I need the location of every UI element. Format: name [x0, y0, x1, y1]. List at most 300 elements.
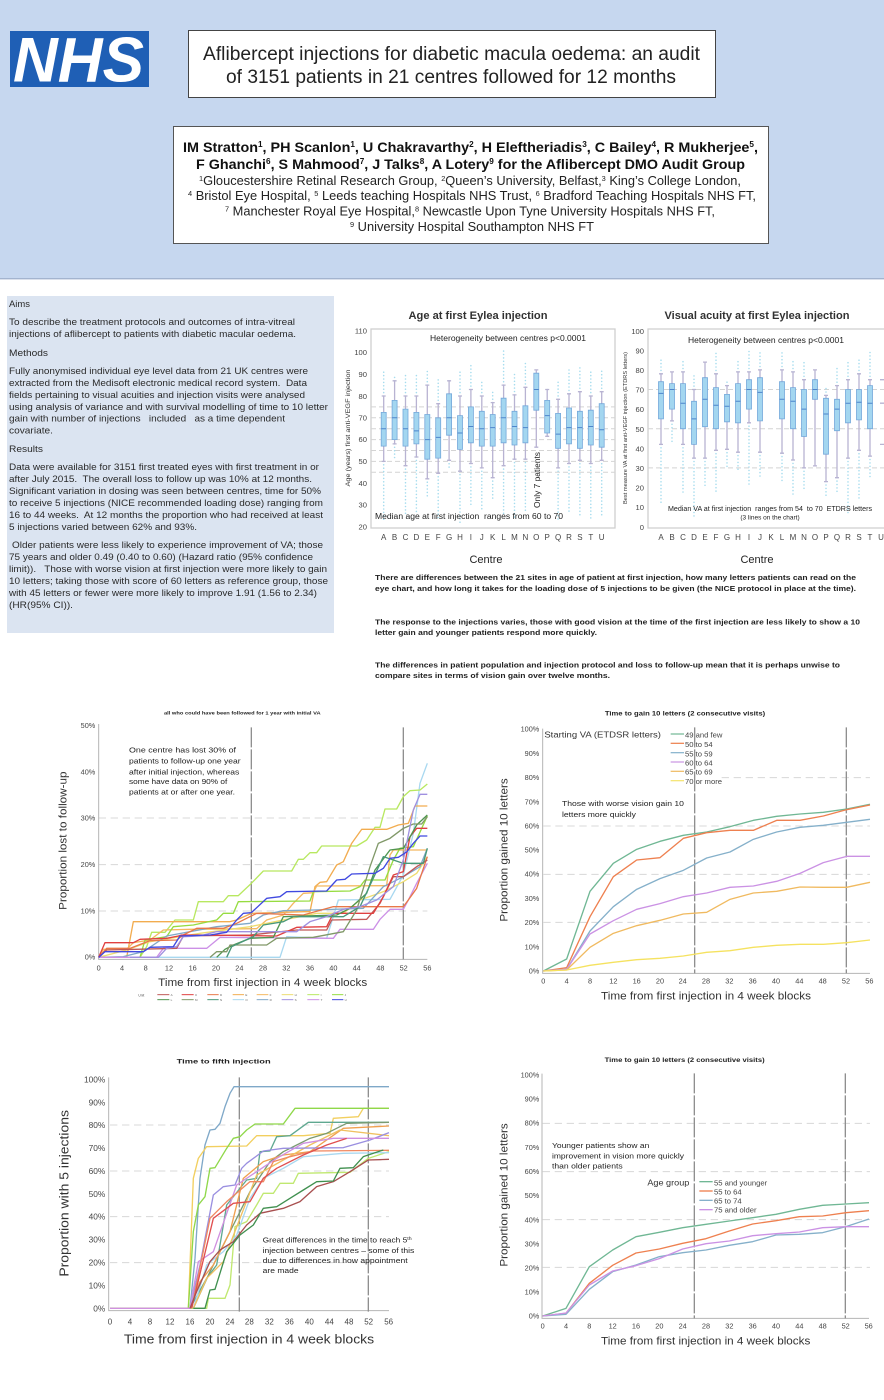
authors: , U Chakravarthy: [355, 139, 469, 155]
y axis labels: 10%: [81, 906, 96, 915]
legend: H: [295, 993, 297, 997]
legend: S: [295, 998, 297, 1002]
text: methods: fields pertaining to visual acuities and injection visits were analysed: [9, 390, 305, 400]
y axis title: Age (years) first anti-VEGF injection: [345, 369, 352, 486]
x axis labels: I: [470, 533, 472, 542]
text: results: 10 letters; taking those with score of 60 letters as reference group, those: [9, 576, 328, 586]
x axis labels: 56: [865, 977, 873, 986]
text: aims: injections of aflibercept to patients with diabetic macular oedema.: [9, 329, 296, 339]
y axis title: Best measure VA at first anti-VEGF injection (ETDRS letters): [623, 352, 629, 504]
legend: 55 to 59: [685, 749, 713, 758]
x axis labels: 56: [384, 1318, 394, 1327]
chart: time to fifth injection: [58, 1058, 415, 1346]
affiliations: Newcastle Upon Tyne University Hospitals NHS FT,: [419, 204, 715, 218]
x axis labels: M: [790, 533, 797, 542]
x axis labels: J: [758, 533, 762, 542]
y axis labels: 70%: [89, 1143, 106, 1153]
VA group lines: [543, 804, 870, 971]
x axis labels: O: [533, 533, 539, 542]
affiliations: Manchester Royal Eye Hospital,: [229, 204, 415, 218]
legend: M: [195, 998, 198, 1002]
annotation: [129, 746, 241, 796]
y axis labels: 80: [359, 392, 367, 401]
x axis labels: 44: [353, 964, 361, 973]
text: results: Significant variation in dosing was seen between centres, time for 50%: [9, 486, 321, 496]
outlier dots: [661, 350, 870, 517]
x axis labels: 0: [108, 1318, 113, 1327]
whiskers: [659, 362, 884, 482]
y axis labels: 10: [636, 503, 644, 512]
annotation: Great differences in the time to reach 5: [263, 1238, 383, 1245]
x axis labels: 24: [679, 977, 687, 986]
y axis labels: 30%: [525, 894, 540, 903]
y axis labels: [84, 1074, 106, 1313]
text: key findings: compare sites in terms of vision gain over twelve months.: [375, 671, 610, 680]
x axis labels: 12: [166, 1318, 175, 1327]
y axis labels: 40: [359, 479, 367, 488]
text: key findings: letter gain and younger patients respond more quickly.: [375, 628, 597, 637]
x axis labels: 8: [148, 1318, 153, 1327]
y axis labels: 50%: [89, 1189, 106, 1199]
x axis labels: 36: [285, 1318, 294, 1327]
chart title: Time to gain 10 letters (2 consecutive visits): [605, 1057, 765, 1064]
text: key findings: eye chart, and how long it takes for the loading dose of 5 injections to be given (the NICE protocol in place at the time).: [375, 584, 856, 593]
legend: 65 to 74: [714, 1197, 742, 1206]
x axis labels: D: [691, 533, 697, 542]
text: methods: gain with number of injections included as a time dependent: [9, 414, 285, 424]
affiliations: University Hospital Southampton NHS FT: [354, 219, 594, 234]
legend: 75 and older: [714, 1206, 757, 1215]
x axis labels: 32: [725, 1322, 733, 1331]
affiliations: Bristol Eye Hospital,: [192, 188, 314, 203]
text: results: 16 to 44 weeks. At 12 months the proportion who had received at least: [9, 510, 323, 520]
medians: [381, 390, 604, 440]
annotation: th: [407, 1236, 412, 1241]
annotation: [552, 1141, 684, 1170]
x axis labels: 0: [541, 977, 545, 986]
y axis labels: 0: [640, 523, 644, 532]
axis titles: Proportion gained 10 letters: [499, 778, 511, 922]
affiliations: 5: [314, 189, 318, 198]
y axis labels: 100%: [521, 725, 540, 734]
authors: , S Mahmood: [271, 156, 360, 172]
annotation: median VA: Median VA at first injection ranges from 54 to 70 ETDRS letters: [668, 506, 873, 513]
axis titles: Time from first injection in 4 week blocks: [158, 977, 368, 989]
boxes: [658, 378, 872, 454]
y axis labels: 10%: [525, 942, 540, 951]
y axis labels: 90%: [525, 749, 540, 758]
axis titles: Proportion with 5 injections: [58, 1110, 72, 1277]
x axis labels: 8: [144, 964, 148, 973]
legend: Age group: [647, 1177, 690, 1187]
affiliations: 1: [199, 174, 203, 183]
x axis labels: G: [724, 533, 730, 542]
x axis labels: 32: [725, 977, 733, 986]
text: methods: using analysis of variance and with survival modelling of time to 10 letter: [9, 402, 328, 412]
x axis labels: L: [780, 533, 785, 542]
y axis labels: 30%: [89, 1235, 106, 1245]
x axis labels: 0: [97, 964, 101, 973]
x axis labels: 40: [305, 1318, 314, 1327]
x axis labels: E: [702, 533, 708, 542]
x axis labels: R: [566, 533, 572, 542]
x axis labels: B: [669, 533, 675, 542]
x axis labels: 32: [265, 1318, 274, 1327]
x axis labels: G: [446, 533, 452, 542]
y axis labels: 0%: [85, 953, 96, 962]
y axis labels: 0%: [93, 1303, 106, 1313]
affiliations: 7: [225, 204, 229, 214]
affiliations: 8: [415, 204, 419, 214]
authors: IM Stratton: [183, 139, 256, 155]
x axis labels: F: [436, 533, 441, 542]
x axis labels: 36: [749, 1322, 757, 1331]
x axis labels: 8: [587, 1322, 591, 1331]
authors: F Ghanchi: [196, 156, 264, 172]
authors box: [174, 126, 768, 244]
legend: 60 to 64: [685, 759, 713, 768]
affiliations: King’s College London,: [606, 173, 741, 188]
annotation: Those with worse vision gain 10: [562, 799, 684, 808]
y axis labels: 60: [636, 405, 644, 414]
x axis labels: P: [545, 533, 550, 542]
authors: 8: [420, 157, 425, 166]
x axis labels: R: [845, 533, 851, 542]
x axis labels: 20: [656, 977, 664, 986]
y axis labels: 60%: [89, 1166, 106, 1176]
x axis labels: 44: [795, 977, 803, 986]
legend: D: [220, 993, 223, 997]
x axis labels: H: [735, 533, 741, 542]
text: methods: covariate.: [9, 426, 53, 436]
centre lines: [110, 1087, 389, 1308]
text: key findings: There are differences between the 21 sites in age of patient at first injection, how many letters patients can read on the: [375, 573, 856, 582]
header band: [0, 0, 884, 279]
x axis labels: 40: [329, 964, 337, 973]
affiliations: [188, 173, 756, 234]
x axis labels: P: [823, 533, 829, 542]
annotation: injection between centres – some of this: [263, 1248, 415, 1255]
chart title: Visual acuity at first Eylea injection: [664, 310, 850, 322]
x axis labels: B: [392, 533, 397, 542]
x axis labels: O: [812, 533, 818, 542]
x axis labels: [658, 533, 884, 542]
annotation: only 7 patients: Only 7 patients: [533, 452, 542, 508]
y axis labels: 20%: [89, 1258, 106, 1268]
x axis labels: 12: [609, 977, 617, 986]
legend: Unit: [138, 993, 144, 997]
y axis labels: [81, 721, 96, 962]
y axis labels: 90: [359, 370, 367, 379]
legend: O: [245, 998, 248, 1002]
authors: for the Aflibercept DMO Audit Group: [494, 156, 745, 172]
centre lines: [99, 763, 427, 957]
x axis labels: 28: [245, 1318, 254, 1327]
x axis labels: K: [768, 533, 774, 542]
text: results: after July 2015. The overall loss to follow up was 10% at 12 months.: [9, 474, 312, 484]
y axis labels: 30: [636, 464, 644, 473]
x axis labels: 48: [819, 1322, 827, 1331]
x axis labels: K: [490, 533, 496, 542]
annotation: after initial injection, whereas: [129, 767, 240, 776]
authors: 9: [489, 157, 494, 166]
annotation: improvement in vision more quickly: [552, 1151, 684, 1160]
x axis labels: T: [868, 533, 873, 542]
text: key findings: The differences in patient population and injection protocol and loss to follow-up mean that it is perhaps unwise to: [375, 660, 840, 670]
affiliations: 2: [441, 174, 445, 183]
title box: of 3151 patients in 21 centres followed for 12 months: [226, 67, 676, 88]
y axis labels: 50: [359, 457, 367, 466]
legend: I: [321, 993, 322, 997]
x axis labels: T: [588, 533, 593, 542]
y axis labels: 100: [354, 348, 367, 357]
annotation: median VA: [668, 506, 873, 522]
x axis labels: 8: [588, 977, 592, 986]
y axis labels: 40%: [525, 1215, 540, 1224]
y axis labels: 90%: [89, 1097, 106, 1107]
y axis labels: 20%: [525, 1263, 540, 1272]
x axis labels: H: [457, 533, 463, 542]
age group lines: [543, 1203, 869, 1316]
x axis labels: S: [856, 533, 862, 542]
annotation: heterogeneity: Heterogeneity between centres p<0.0001: [430, 334, 587, 343]
x axis labels: 56: [423, 964, 431, 973]
authors: , C Bailey: [587, 139, 652, 155]
x axis labels: 32: [282, 964, 290, 973]
x axis labels: 36: [749, 977, 757, 986]
whiskers: [382, 370, 604, 479]
annotation: patients at or after one year.: [129, 787, 235, 796]
y axis labels: 50%: [525, 1191, 540, 1200]
icon: NHS logo: NHS: [13, 26, 144, 96]
x axis labels: 4: [565, 977, 569, 986]
x axis labels: 28: [702, 1322, 710, 1331]
authors: 3: [582, 140, 587, 149]
legend: [647, 1177, 768, 1215]
x axis labels: [108, 1318, 394, 1327]
legend: U: [345, 998, 347, 1002]
panel: abstract: [7, 296, 334, 633]
legend: C: [195, 993, 198, 997]
text: results: limit)). Those with worse vision at first injection were more likely to gain: [9, 564, 327, 574]
x axis labels: [541, 977, 873, 986]
x axis labels: S: [577, 533, 583, 542]
y axis labels: 100: [631, 327, 644, 336]
y axis labels: 10%: [89, 1281, 106, 1291]
affiliations: Leeds teaching Hospitals NHS Trust,: [318, 188, 536, 203]
authors: 4: [651, 140, 657, 149]
affiliations: Bradford Teaching Hospitals NHS FT,: [540, 188, 756, 203]
x axis labels: 4: [120, 964, 124, 973]
axis titles: Time from first injection in 4 week blocks: [124, 1332, 374, 1346]
x axis labels: D: [414, 533, 420, 542]
legend: 70 or more: [685, 777, 722, 786]
x axis labels: F: [714, 533, 719, 542]
x axis labels: 28: [259, 964, 267, 973]
y axis labels: 80%: [89, 1120, 106, 1130]
axis titles: Time from first injection in 4 week blocks: [601, 991, 812, 1003]
x axis labels: N: [523, 533, 529, 542]
x axis labels: 16: [189, 964, 197, 973]
y axis labels: [354, 326, 367, 532]
chart title: all who could have been followed for 1 year with initial VA: [164, 710, 321, 715]
annotation: letters more quickly: [562, 810, 636, 819]
annotation: heterogeneity: Heterogeneity between centres p<0.0001: [688, 336, 845, 345]
y axis labels: 40%: [89, 1212, 106, 1222]
x axis labels: U: [599, 533, 605, 542]
text: results: Older patients were less likely to experience improvement of VA; those: [12, 540, 323, 550]
text: key findings: The response to the injections varies, those with good vision at the time of the first injection are less likely to show a 10: [375, 618, 860, 626]
axis titles: [57, 771, 368, 989]
y axis labels: 20: [636, 484, 644, 492]
axis titles: [499, 778, 812, 1003]
x axis labels: 40: [772, 1322, 780, 1331]
authors: , R Mukherjee: [656, 139, 750, 155]
chart: age box plot: [345, 310, 615, 566]
legend: E: [245, 993, 247, 997]
legend: 50 to 54: [685, 740, 713, 749]
text: results: (HR(95% CI)).: [9, 600, 73, 610]
annotation: some have data on 90% of: [129, 777, 228, 786]
y axis labels: 30: [359, 500, 367, 510]
text: aims: [9, 317, 296, 339]
x axis labels: 12: [609, 1322, 617, 1331]
x axis labels: C: [680, 533, 686, 542]
x axis labels: I: [748, 533, 750, 542]
y axis labels: 70%: [525, 1143, 540, 1152]
affiliations: Gloucestershire Retinal Research Group,: [203, 173, 441, 188]
legend: 55 and younger: [714, 1178, 768, 1187]
axis titles: Proportion gained 10 letters: [499, 1123, 511, 1267]
text: aims: To describe the treatment protocols and outcomes of intra-vitreal: [9, 317, 295, 327]
y axis labels: 30%: [525, 1239, 540, 1248]
legend: [544, 730, 723, 786]
x axis labels: M: [511, 533, 518, 542]
legend: A: [171, 993, 173, 997]
chart: gain by age group: [499, 1057, 873, 1348]
y axis labels: 70: [636, 386, 644, 394]
x axis labels: 36: [306, 964, 314, 973]
legend: F: [270, 993, 272, 997]
x axis labels: 20: [655, 1322, 663, 1331]
chart: gain by starting VA: [499, 711, 873, 1003]
medians: [658, 390, 872, 419]
y axis labels: 100%: [84, 1074, 106, 1084]
affiliations: 9: [350, 220, 354, 229]
y axis labels: 40: [636, 444, 644, 454]
x axis labels: 40: [772, 977, 780, 986]
legend: Starting VA (ETDSR letters): [544, 730, 661, 740]
y axis labels: 60: [359, 435, 367, 444]
x axis labels: 20: [212, 964, 220, 973]
text: methods: Fully anonymised individual eye level data from 21 UK centres were: [9, 366, 308, 376]
x axis labels: 44: [325, 1318, 334, 1327]
annotation: One centre has lost 30% of: [129, 746, 237, 755]
legend: [138, 993, 347, 1002]
outlier dots: [384, 350, 602, 524]
heading: results: Results: [9, 444, 43, 454]
y axis labels: [521, 725, 540, 975]
y axis labels: [521, 1070, 540, 1321]
y axis labels: 30%: [81, 814, 96, 823]
x axis labels: 28: [702, 977, 710, 986]
annotation: patients to follow-up one year: [129, 756, 241, 765]
x axis labels: A: [381, 533, 387, 542]
x axis title: Centre: [469, 554, 503, 566]
x axis labels: 4: [564, 1322, 568, 1331]
x axis labels: 52: [400, 964, 408, 973]
chart title: Age at first Eylea injection: [408, 310, 548, 322]
y axis labels: 80%: [525, 1119, 540, 1128]
x axis labels: 0: [541, 1322, 545, 1331]
x axis labels: C: [403, 533, 409, 542]
y axis labels: 60%: [525, 1167, 540, 1176]
x axis labels: U: [878, 533, 884, 542]
text: methods: [9, 366, 328, 436]
title box: [188, 30, 716, 98]
y axis labels: 80%: [525, 773, 540, 782]
y axis labels: 100%: [521, 1070, 540, 1079]
authors: , H Eleftheriadis: [474, 139, 582, 155]
y axis labels: 50: [636, 425, 644, 434]
text: methods: extracted from the Medisoft electronic medical record system. Data: [9, 378, 308, 388]
text: key findings: [375, 573, 860, 680]
affiliations: 4: [188, 189, 192, 198]
y axis labels: 20%: [81, 860, 96, 869]
y axis labels: 110: [355, 326, 367, 336]
x axis labels: 20: [206, 1318, 215, 1327]
heading: methods: Methods: [9, 348, 48, 358]
y axis labels: 40%: [525, 870, 540, 879]
legend: 49 and few: [685, 731, 723, 740]
annotation: are made: [263, 1268, 299, 1275]
annotation: than older patients: [552, 1161, 623, 1170]
affiliations: 3: [602, 174, 606, 183]
title box: Aflibercept injections for diabetic macula oedema: an audit: [203, 44, 701, 65]
text: results: to receive 5 injections (NICE recommended loading dose) ranging from: [9, 498, 323, 508]
x axis labels: 52: [842, 1322, 850, 1331]
axis titles: [499, 1123, 811, 1348]
affiliations: Queen’s University, Belfast,: [445, 173, 602, 188]
axis titles: [58, 1110, 374, 1346]
y axis labels: 70%: [525, 797, 540, 806]
text: results: [8, 462, 328, 610]
authors: , J Talks: [364, 156, 420, 172]
x axis labels: 44: [795, 1322, 803, 1331]
x axis labels: 24: [226, 1318, 235, 1327]
authors: , A Lotery: [424, 156, 489, 172]
chart title: Time to gain 10 letters (2 consecutive visits): [605, 711, 765, 718]
x axis labels: 48: [345, 1318, 354, 1327]
x axis labels: 56: [865, 1322, 873, 1331]
x axis labels: N: [801, 533, 807, 542]
x axis labels: 24: [679, 1322, 687, 1331]
authors: 1: [258, 140, 263, 149]
y axis labels: 80: [636, 366, 644, 375]
authors: [183, 139, 758, 172]
y axis labels: 0%: [529, 1312, 540, 1321]
x axis labels: L: [501, 533, 506, 542]
text: results: 75 years and older 0.49 (0.40 to 0.60) (Hazard ratio (95% confidence: [9, 552, 313, 562]
text: results: 5 injections varied between 62% and 93%.: [9, 522, 197, 532]
legend: J: [345, 993, 347, 997]
y axis labels: 0%: [529, 966, 540, 975]
y axis labels: 40%: [81, 767, 96, 776]
y axis labels: 70: [359, 414, 367, 422]
x axis labels: 16: [633, 977, 641, 986]
y axis labels: 90%: [525, 1095, 540, 1104]
authors: 1: [350, 140, 356, 149]
